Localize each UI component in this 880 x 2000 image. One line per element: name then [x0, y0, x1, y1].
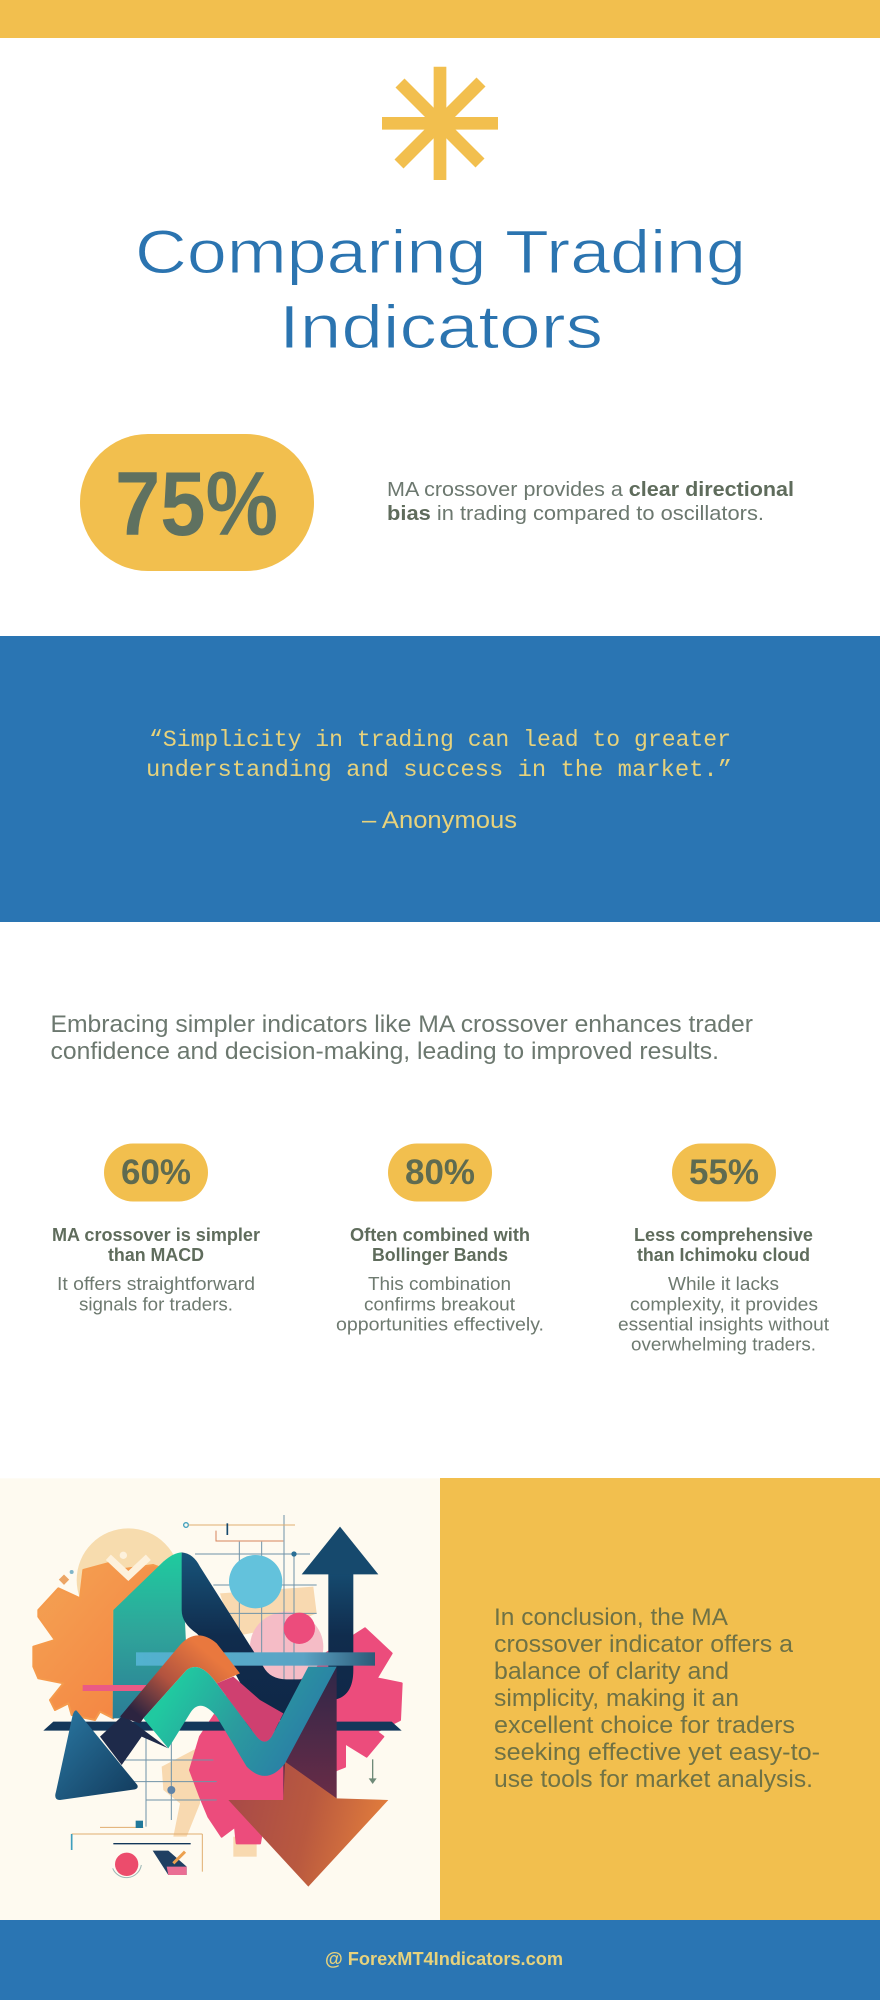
conclusion text [494, 1604, 820, 1793]
grid lines [123, 1515, 317, 1827]
dark column [283, 1667, 337, 1803]
icon: asterisk [382, 67, 498, 180]
badge: 80% [388, 1144, 492, 1202]
heading: Ichimoku cloud [634, 1225, 813, 1265]
text: MA crossover statement [387, 478, 794, 525]
panel: quote [0, 636, 880, 922]
stat badge: 75% [80, 434, 314, 571]
quote text: “Simplicity in trading can lead to greater [149, 727, 731, 753]
heading: MA crossover simpler [52, 1225, 260, 1265]
heading: MA crossover simpler: MA crossover is simpler [52, 1225, 260, 1245]
badge: 80%: 80% [405, 1153, 475, 1192]
description: It offers straightforward [57, 1274, 255, 1294]
conclusion text: balance of clarity and [494, 1658, 729, 1685]
quote attribution: – Anonymous [362, 807, 517, 834]
dark arm [100, 1715, 168, 1765]
peach blobs [162, 1587, 317, 1857]
badge: 60%: 60% [121, 1153, 191, 1192]
navy shape [182, 1552, 353, 1720]
conclusion text: simplicity, making it an [494, 1685, 739, 1712]
triangle [55, 1710, 138, 1800]
pink circle [284, 1613, 315, 1644]
text: embracing simpler indicators: Embracing simpler indicators like MA crossover enhances trader [50, 1011, 753, 1038]
panel: illustration [0, 1478, 440, 1920]
heading: Ichimoku cloud: Less comprehensive [634, 1225, 813, 1245]
badge: 60% [104, 1144, 208, 1202]
conclusion text: excellent choice for traders [494, 1712, 795, 1739]
description [57, 1274, 255, 1314]
quote text: understanding and success in the market.” [146, 757, 732, 783]
pink band under wave [217, 1677, 283, 1742]
column: 80% stat [336, 1144, 544, 1334]
arrow head up [302, 1527, 378, 1574]
text: embracing simpler indicators [50, 1011, 753, 1065]
description [618, 1274, 829, 1354]
badge: 55% [672, 1144, 776, 1202]
heading: Ichimoku cloud: than Ichimoku cloud [637, 1245, 810, 1265]
white check mark [108, 1552, 148, 1576]
heading: MA crossover simpler: than MACD [108, 1245, 204, 1265]
description: opportunities effectively. [336, 1314, 544, 1334]
heading: Bollinger Bands: Bollinger Bands [372, 1245, 508, 1265]
quote text [146, 727, 732, 783]
pink gear [190, 1628, 402, 1843]
text: MA crossover statement: bias in trading compared to oscillators. [387, 502, 764, 525]
title [135, 218, 746, 361]
description: While it lacks [668, 1274, 779, 1294]
small diagrams [72, 1523, 377, 1878]
conclusion text: seeking effective yet easy-to- [494, 1739, 820, 1766]
column: 60% stat [52, 1144, 260, 1314]
orange gear [33, 1563, 167, 1720]
light blue circle [229, 1555, 282, 1608]
description: overwhelming traders. [631, 1334, 816, 1354]
stat badge: 75%: 75% [115, 454, 278, 555]
heading: Bollinger Bands [350, 1225, 530, 1265]
badge: 55%: 55% [689, 1153, 759, 1192]
light blue bar [136, 1652, 375, 1666]
footer credit: @ ForexMT4Indicators.com [325, 1949, 563, 1969]
description: complexity, it provides [630, 1294, 818, 1314]
title: Indicators [279, 293, 603, 361]
conclusion text: use tools for market analysis. [494, 1766, 813, 1793]
navy horizontal bar [43, 1722, 402, 1731]
orange ribbon [120, 1635, 240, 1723]
small shape icon [153, 1851, 187, 1875]
panel: conclusion [440, 1478, 880, 1920]
teal ribbon [143, 1667, 337, 1776]
conclusion text: crossover indicator offers a [494, 1631, 794, 1658]
pink accent bar [83, 1685, 146, 1691]
heading: Bollinger Bands: Often combined with [350, 1225, 530, 1245]
description: essential insights without [618, 1314, 829, 1334]
red circle [115, 1853, 138, 1876]
description: This combination [368, 1274, 511, 1294]
text: MA crossover statement: MA crossover provides a clear directional [387, 478, 794, 501]
conclusion text: In conclusion, the MA [494, 1604, 728, 1631]
title: Comparing Trading [135, 218, 746, 286]
top yellow bar [0, 0, 880, 38]
column: 55% stat [618, 1144, 829, 1354]
text: embracing simpler indicators: confidence and decision-making, leading to improved results. [50, 1038, 719, 1065]
down arrow [228, 1762, 388, 1887]
footer [0, 1920, 880, 2000]
description: confirms breakout [364, 1294, 515, 1314]
description [336, 1274, 544, 1334]
description: signals for traders. [79, 1294, 233, 1314]
teal panel [113, 1552, 187, 1718]
